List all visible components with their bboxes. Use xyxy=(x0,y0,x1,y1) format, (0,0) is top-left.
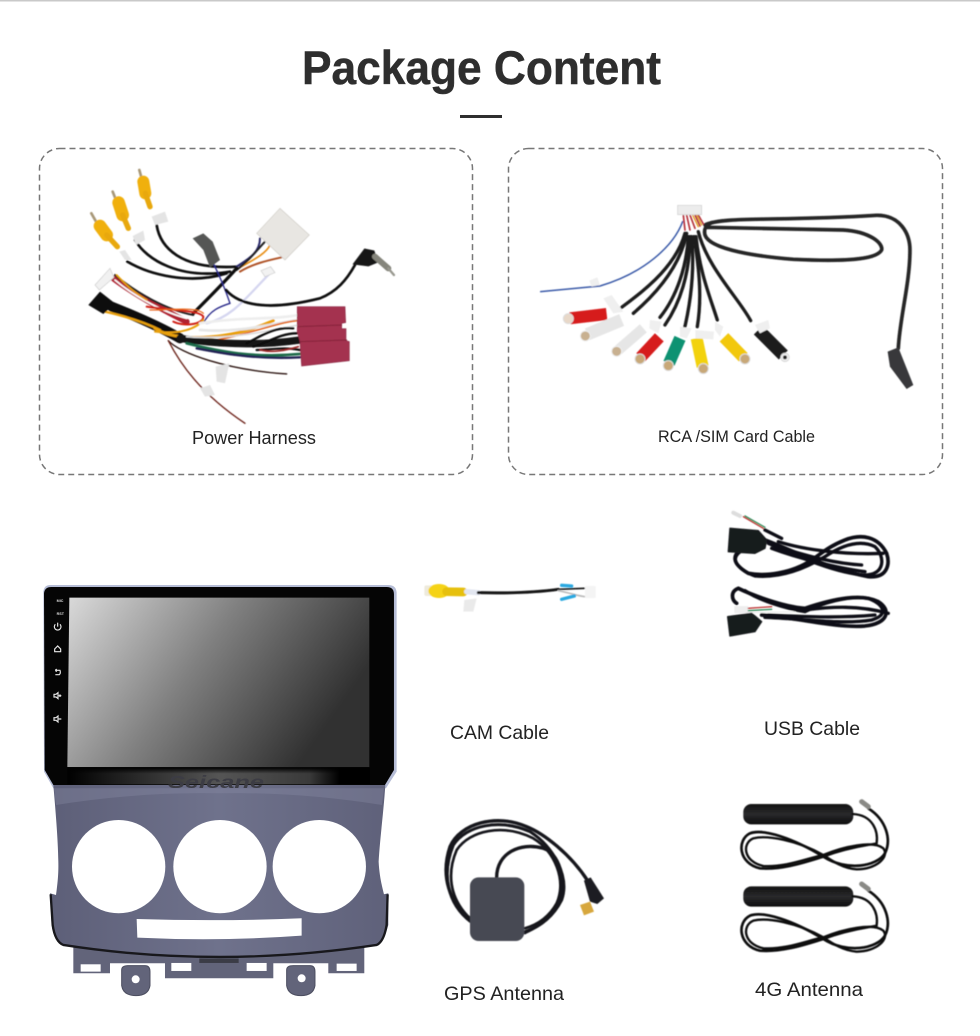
side buttons xyxy=(54,599,65,722)
top border line xyxy=(0,0,980,2)
image: GPS antenna xyxy=(446,821,604,941)
item: 4G antenna xyxy=(741,802,888,1001)
RCA plug: white 2 xyxy=(612,328,643,356)
RCA plug: red xyxy=(563,314,607,324)
RCA plug: green xyxy=(663,338,680,371)
title underline xyxy=(460,115,502,118)
label: USB cable: USB Cable xyxy=(764,718,860,740)
label: power harness: Power Harness xyxy=(192,427,316,448)
label: RCA / SIM card cable: RCA /SIM Card Cable xyxy=(658,428,815,446)
lower slot xyxy=(137,918,302,939)
climate knob openings xyxy=(72,820,366,913)
panel lower edge xyxy=(51,894,388,957)
icon: home xyxy=(55,646,61,652)
small white connector xyxy=(261,267,275,277)
image: power harness cable xyxy=(88,170,394,423)
icon: volume up xyxy=(54,693,61,699)
image: RCA / SIM cable xyxy=(541,205,913,389)
brand logo: Seicane xyxy=(168,772,264,792)
image: CAM cable xyxy=(424,584,596,612)
RCA plug: red 2 xyxy=(635,337,659,364)
black connector xyxy=(88,292,115,314)
SIM card end xyxy=(888,347,913,389)
glossy strip under screen xyxy=(67,768,370,784)
image: 4G antennas xyxy=(741,802,888,952)
white pin connector xyxy=(678,205,702,215)
RCA plug: yellow 2 xyxy=(724,337,750,364)
label: GPS antenna: GPS Antenna xyxy=(444,983,564,1005)
icon: volume down xyxy=(54,716,61,722)
screen xyxy=(67,598,369,767)
dash panel xyxy=(50,785,388,958)
grey connector xyxy=(193,233,220,267)
cable tags xyxy=(589,277,770,339)
bottom antenna xyxy=(741,884,888,952)
item: CAM cable xyxy=(424,584,596,744)
audio jack xyxy=(355,250,377,265)
mounting frame xyxy=(73,945,364,996)
head unit radio xyxy=(43,585,397,996)
image: USB cables xyxy=(728,513,888,636)
icon: power xyxy=(54,623,61,630)
red connector block xyxy=(297,307,349,366)
panel shoulder highlight xyxy=(54,788,384,805)
bottom USB cable xyxy=(728,588,888,636)
icon: back xyxy=(55,669,60,675)
yellow RCA plugs xyxy=(91,170,150,247)
item: USB cable xyxy=(728,513,888,740)
screen bezel xyxy=(44,587,394,785)
silver outer bezel xyxy=(43,585,397,788)
cable tags xyxy=(119,212,229,397)
GPS puck xyxy=(470,877,524,941)
white connector xyxy=(257,208,309,260)
item: GPS antenna xyxy=(444,821,604,1005)
side buttons: RST xyxy=(57,612,65,616)
top antenna xyxy=(741,802,888,869)
white multi-pin connector xyxy=(95,268,114,290)
RCA plug: yellow xyxy=(697,338,708,374)
top USB cable xyxy=(728,513,888,577)
RCA plug: white xyxy=(580,320,622,341)
label: CAM cable: CAM Cable xyxy=(450,722,549,744)
side buttons: MIC xyxy=(57,599,64,603)
label: 4G antenna: 4G Antenna xyxy=(755,979,863,1001)
title: Package Content xyxy=(302,42,661,95)
panel: RCA / SIM card cable xyxy=(508,148,942,474)
SMA connector xyxy=(584,877,604,904)
panel: power harness xyxy=(40,148,472,474)
audio socket: black xyxy=(758,330,789,362)
